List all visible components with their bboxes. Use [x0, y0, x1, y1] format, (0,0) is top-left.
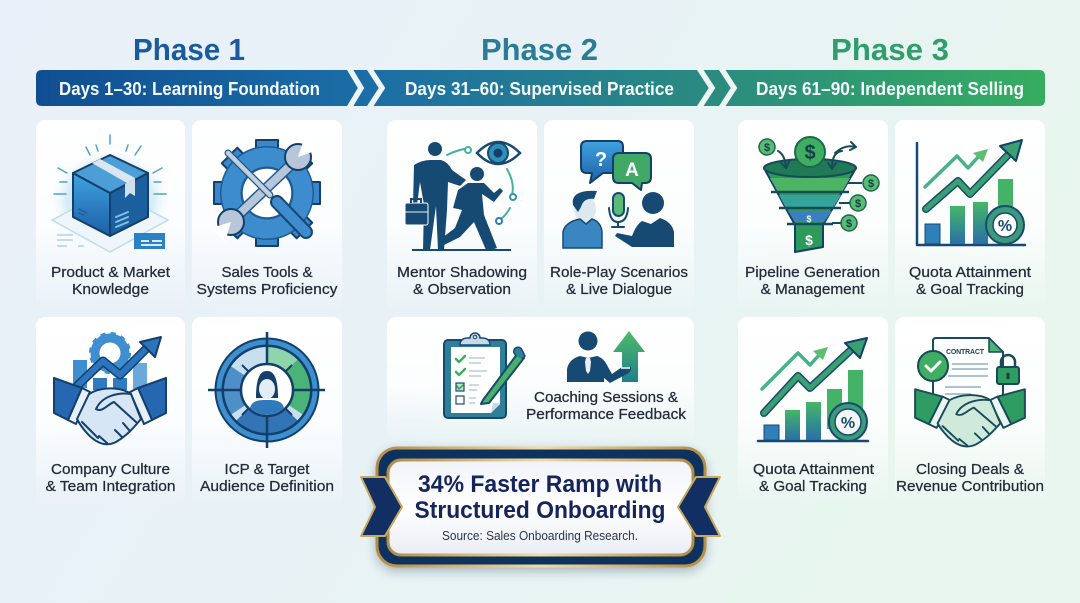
- banner: days 1-30: [36, 70, 362, 106]
- panel: phase 1: [36, 32, 362, 507]
- card: company culture: [36, 317, 185, 507]
- card: product and market knowledge: [36, 120, 185, 312]
- card: sales tools: [192, 120, 342, 312]
- icon: pipeline funnel: $: [846, 218, 852, 230]
- panel: phase 2: [349, 32, 720, 566]
- label: Closing Deals &: [916, 461, 1024, 478]
- callout text: Structured Onboarding: [414, 497, 666, 524]
- card: ICP and target audience: [192, 317, 342, 507]
- icon: pipeline funnel: [759, 137, 879, 252]
- icon: pipeline funnel: $: [855, 198, 861, 210]
- label: Systems Proficiency: [196, 281, 338, 298]
- callout: 34% faster ramp badge: [361, 448, 720, 566]
- label: Sales Tools &: [222, 264, 312, 281]
- icon: role-play dialogue: [563, 141, 674, 248]
- label: Revenue Contribution: [896, 478, 1044, 495]
- label: Company Culture: [51, 461, 170, 478]
- label: & Team Integration: [46, 478, 176, 495]
- label: & Management: [760, 281, 865, 298]
- label: Pipeline Generation: [745, 264, 880, 281]
- banner: days 31-60: Days 31–60: Supervised Practice: [405, 79, 674, 99]
- heading: Phase 1: Phase 1: [133, 32, 245, 67]
- label: Product & Market: [51, 264, 171, 281]
- heading: Phase 2: Phase 2: [481, 32, 598, 67]
- icon: gear and tools: [211, 136, 320, 246]
- icon: quota chart: [917, 140, 1025, 245]
- icon: quota chart: [758, 338, 868, 441]
- card: coaching sessions: [387, 317, 694, 442]
- card: mentor shadowing: [387, 120, 537, 312]
- label: & Observation: [413, 281, 511, 298]
- icon: contract handshake: CONTRACT: [946, 349, 985, 356]
- banner: days 1-30: Days 1–30: Learning Foundation: [59, 79, 320, 99]
- label: Audience Definition: [200, 478, 334, 495]
- icon: target audience: [208, 332, 325, 448]
- ribbon tails: [361, 477, 720, 536]
- label: Role-Play Scenarios: [550, 264, 688, 281]
- icon: contract handshake: [915, 338, 1025, 447]
- label: Mentor Shadowing: [397, 264, 527, 281]
- card: quota attainment top: [895, 120, 1045, 312]
- icon: mentor shadowing: [405, 142, 520, 250]
- icon: clipboard checklist: [444, 333, 525, 418]
- callout text: 34% Faster Ramp with: [418, 471, 662, 498]
- label: & Live Dialogue: [566, 281, 672, 298]
- icon: product box: [48, 135, 172, 252]
- label: Knowledge: [72, 281, 149, 298]
- card: pipeline generation: [738, 120, 888, 312]
- icon: pipeline funnel: $: [868, 178, 874, 190]
- icon: quota chart: %: [998, 218, 1012, 235]
- icon: pipeline funnel: $: [806, 214, 812, 224]
- label: & Goal Tracking: [759, 478, 867, 495]
- label: Quota Attainment: [753, 461, 875, 478]
- banner: days 61-90: Days 61–90: Independent Selling: [756, 79, 1024, 99]
- source: Source: Sales Onboarding Research.: [442, 529, 638, 543]
- icon: quota chart: %: [841, 415, 855, 432]
- icon: pipeline funnel: $: [764, 142, 770, 154]
- label: Performance Feedback: [526, 406, 687, 423]
- label: & Goal Tracking: [916, 281, 1024, 298]
- icon: pipeline funnel: $: [805, 232, 813, 248]
- icon: coaching person with growth arrow: [567, 331, 645, 383]
- label: Coaching Sessions &: [534, 389, 678, 406]
- icon: role-play dialogue: A: [625, 160, 639, 181]
- card: role-play scenarios: [544, 120, 694, 312]
- heading: Phase 3: Phase 3: [831, 32, 949, 67]
- icon: pipeline funnel: $: [804, 142, 816, 164]
- icon: role-play dialogue: ?: [595, 149, 607, 171]
- card: closing deals: [895, 317, 1045, 507]
- banner: days 31-60: [349, 68, 712, 108]
- label: ICP & Target: [224, 461, 310, 478]
- banner: days 61-90: [699, 68, 1045, 108]
- card: quota attainment bottom: [738, 317, 888, 507]
- icon: culture handshake: [54, 334, 166, 444]
- label: Quota Attainment: [909, 264, 1032, 281]
- panel: phase 3: [699, 32, 1045, 507]
